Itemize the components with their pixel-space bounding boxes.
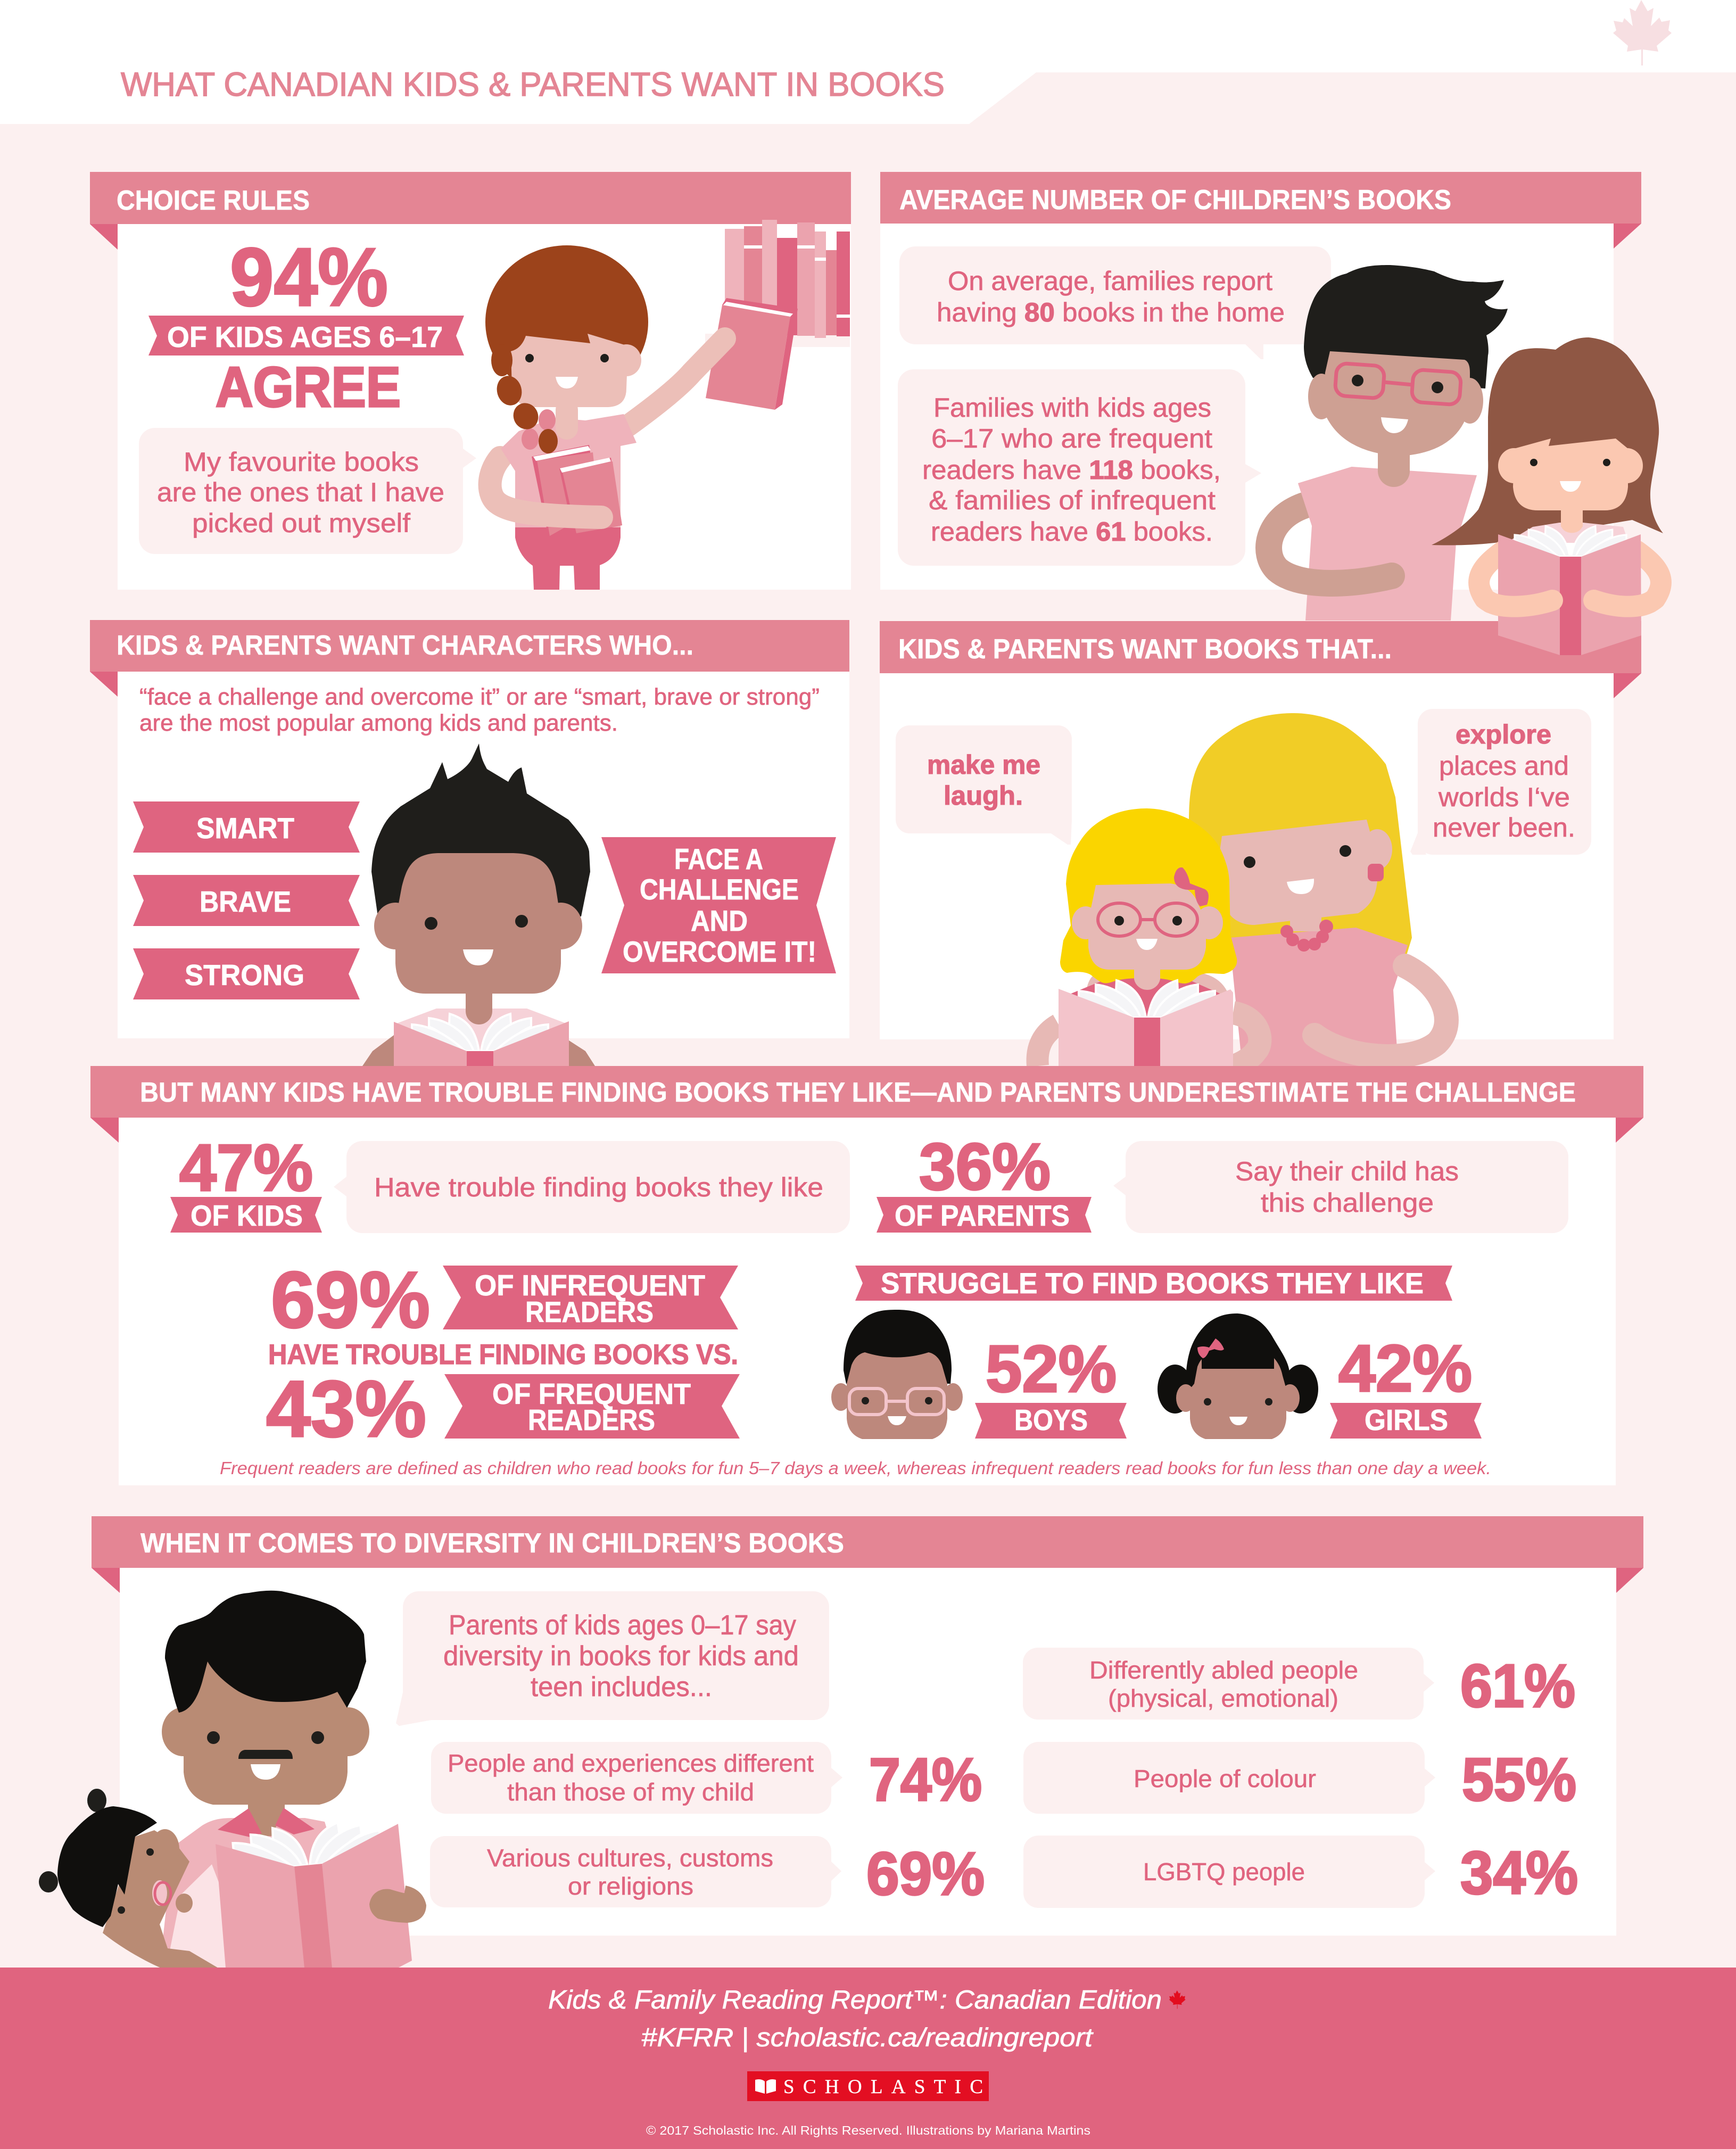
heading: trouble finding books: BUT MANY KIDS HAVE TROUBLE FINDING BOOKS THEY LIKE—AND PARENTS UNDERESTIMATE THE CHALLENGE [140, 1077, 1576, 1108]
stat: 47 percent of kids: 47% [179, 1131, 313, 1205]
stat word: agree: AGREE [216, 355, 401, 419]
heading: diversity [92, 1516, 1643, 1568]
text: most popular characters: are the most popular among kids and parents. [139, 710, 618, 736]
speech bubble: 80 books: On average, families report [948, 266, 1272, 296]
logo: scholastic: SCHOLASTIC [783, 2076, 983, 2098]
icon: girl head [1158, 1313, 1318, 1439]
ribbon: smart: SMART [196, 812, 294, 845]
ribbon: brave: BRAVE [200, 885, 291, 918]
heading: average number of books [880, 172, 1641, 224]
heading: books that [880, 621, 1641, 673]
illustration: girl reading [1432, 337, 1663, 655]
speech bubble: explore places: places and [1439, 751, 1569, 781]
stat: 36 percent of parents [877, 1130, 1092, 1233]
logo: scholastic [747, 2071, 989, 2101]
stat: 36 percent of parents: 36% [919, 1130, 1051, 1204]
panel: average number of books [880, 172, 1663, 655]
speech bubble: parents say: diversity in books for kids and [443, 1641, 799, 1672]
stat: 69 percent of infrequent readers: READERS [525, 1295, 654, 1328]
speech bubble: 80 books [899, 246, 1331, 359]
stat: 69 percent of infrequent readers [271, 1255, 738, 1344]
speech bubble: favourite books: picked out myself [192, 508, 410, 538]
option: differently abled 61 percent: Differently abled people [1089, 1656, 1358, 1684]
heading: choice rules [90, 172, 851, 224]
speech bubble: explore places: explore [1456, 720, 1551, 749]
heading: characters who [90, 620, 849, 672]
option: cultures 69 percent: 69% [866, 1840, 985, 1908]
option: people of colour 55 percent: 55% [1462, 1746, 1576, 1814]
stat: 47 percent of kids [170, 1131, 322, 1233]
option: people of colour 55 percent [1023, 1742, 1576, 1814]
text: most popular characters: “face a challenge and overcome it” or are “smart, brave or strong” [139, 684, 820, 710]
speech bubble: make me laugh: make me [927, 750, 1040, 780]
heading: trouble finding books [90, 1066, 1643, 1118]
illustration: father reading with baby [39, 1591, 426, 1969]
speech bubble: 118 and 61 books: & families of infrequent [929, 485, 1216, 515]
footnote: Frequent readers are defined as children who read books for fun 5–7 days a week, whereas infrequent readers read books for fun less than one day a week. [220, 1458, 1491, 1478]
speech bubble: explore places: never been. [1433, 813, 1575, 842]
panel: characters who [90, 620, 849, 1066]
ribbon: smart [133, 801, 360, 853]
icon: red maple leaf [1169, 1990, 1186, 2009]
stat: 52 percent boys [975, 1333, 1127, 1439]
speech bubble: 80 books: having 80 books in the home [937, 297, 1285, 327]
speech bubble: explore places: worlds I‘ve [1438, 782, 1570, 812]
illustration: father with glasses [1269, 265, 1508, 621]
speech bubble: favourite books: are the ones that I have [157, 477, 444, 507]
illustration: bookshelf [705, 220, 850, 347]
text: most popular characters [139, 684, 820, 736]
speech bubble: favourite books [139, 428, 476, 554]
ribbon: face a challenge and overcome it: OVERCOME IT! [623, 935, 816, 968]
stat: 43 percent of frequent readers: 43% [266, 1364, 426, 1453]
speech bubble: favourite books: My favourite books [184, 447, 419, 477]
title: WHAT CANADIAN KIDS & PARENTS WANT IN BOOKS [121, 66, 945, 103]
stat: 43 percent of frequent readers [266, 1364, 740, 1453]
footer: report title: Kids & Family Reading Report™: Canadian Edition [548, 1986, 1162, 2014]
ribbon: strong: STRONG [185, 958, 304, 991]
ribbon: strong [133, 948, 360, 999]
icon: maple leaf [1613, 0, 1672, 65]
option: differently abled 61 percent [1023, 1648, 1575, 1720]
option: people and experiences 74 percent: than those of my child [507, 1778, 754, 1806]
option: people of colour 55 percent: People of colour [1134, 1765, 1316, 1792]
stat: 36 percent of parents: OF PARENTS [895, 1199, 1070, 1232]
option: cultures 69 percent [430, 1836, 985, 1908]
ribbon: face a challenge and overcome it: CHALLENGE [640, 873, 799, 906]
panel: diversity [39, 1516, 1643, 1969]
stat: 52 percent boys: 52% [986, 1333, 1117, 1406]
icon: boy head [831, 1310, 963, 1439]
stat: 52 percent boys: BOYS [1014, 1403, 1088, 1436]
option: differently abled 61 percent: 61% [1460, 1652, 1575, 1720]
option: people and experiences 74 percent: People and experiences different [448, 1749, 814, 1777]
footer [0, 1968, 1736, 2149]
illustration: mother and daughter reading [1037, 713, 1446, 1070]
stat: 43 percent of frequent readers: OF FREQUENT [492, 1377, 691, 1410]
heading: diversity: WHEN IT COMES TO DIVERSITY IN CHILDREN’S BOOKS [140, 1528, 844, 1559]
speech bubble: make me laugh: laugh. [944, 781, 1023, 811]
speech bubble: trouble finding books: Have trouble finding books they like [374, 1172, 823, 1202]
footer: copyright: © 2017 Scholastic Inc. All Rights Reserved. Illustrations by Mariana Martins [646, 2123, 1090, 2137]
option: cultures 69 percent: Various cultures, customs [487, 1844, 773, 1872]
option: differently abled 61 percent: (physical, emotional) [1108, 1684, 1338, 1712]
ribbon: face a challenge and overcome it [601, 837, 836, 973]
speech bubble: parents say: Parents of kids ages 0–17 say [449, 1610, 796, 1641]
speech bubble: 118 and 61 books: readers have 61 books. [931, 517, 1213, 547]
illustration: girl reaching for a book [485, 245, 798, 590]
ribbon: brave [133, 875, 360, 926]
panel: books that [880, 621, 1641, 1070]
option: lgbtq 34 percent [1023, 1836, 1578, 1908]
speech bubble: make me laugh [896, 725, 1072, 845]
option: cultures 69 percent: or religions [568, 1872, 693, 1900]
panel: choice rules [90, 172, 851, 590]
stat: 69 percent of infrequent readers: OF INFREQUENT [475, 1269, 705, 1302]
illustration: boy reading [362, 743, 595, 1066]
speech bubble: parents say [396, 1591, 829, 1726]
footer: hashtag and url: #KFRR | scholastic.ca/readingreport [641, 2023, 1094, 2052]
stat: 42 percent girls: GIRLS [1365, 1403, 1448, 1436]
ribbon: struggle to find books: STRUGGLE TO FIND BOOKS THEY LIKE [881, 1267, 1424, 1300]
stat: 47 percent of kids: OF KIDS [191, 1199, 303, 1232]
speech bubble: say their child: this challenge [1261, 1188, 1434, 1218]
speech bubble: parents say: teen includes... [531, 1672, 712, 1702]
stat: 94 percent: 94% [230, 231, 388, 323]
heading: characters who: KIDS & PARENTS WANT CHARACTERS WHO... [117, 630, 693, 661]
heading: books that: KIDS & PARENTS WANT BOOKS THAT... [898, 634, 1392, 665]
ribbon: of kids ages 6-17: OF KIDS AGES 6–17 [167, 320, 443, 353]
speech bubble: trouble finding books [334, 1141, 850, 1233]
stat: 43 percent of frequent readers: READERS [528, 1403, 655, 1436]
panel: trouble finding books [90, 1066, 1643, 1485]
option: people and experiences 74 percent [431, 1742, 982, 1814]
ribbon: face a challenge and overcome it: FACE A [674, 842, 763, 875]
option: lgbtq 34 percent: 34% [1460, 1839, 1578, 1907]
option: lgbtq 34 percent: LGBTQ people [1143, 1858, 1305, 1886]
speech bubble: 118 and 61 books: 6–17 who are frequent [931, 424, 1212, 453]
heading: choice rules: CHOICE RULES [117, 185, 310, 216]
option: people and experiences 74 percent: 74% [869, 1746, 982, 1814]
heading: average number of books: AVERAGE NUMBER OF CHILDREN’S BOOKS [899, 185, 1451, 216]
speech bubble: 118 and 61 books: readers have 118 books, [922, 455, 1221, 485]
ribbon: face a challenge and overcome it: AND [691, 904, 748, 937]
stat: 42 percent girls: 42% [1338, 1332, 1472, 1406]
text: have trouble finding books vs: HAVE TROUBLE FINDING BOOKS VS. [268, 1339, 738, 1370]
speech bubble: 118 and 61 books: Families with kids ages [933, 393, 1211, 423]
stat: 69 percent of infrequent readers: 69% [271, 1255, 430, 1344]
speech bubble: say their child [1113, 1141, 1568, 1233]
speech bubble: say their child: Say their child has [1235, 1156, 1459, 1186]
speech bubble: 118 and 61 books [898, 369, 1261, 566]
stat: 42 percent girls [1330, 1332, 1482, 1439]
speech bubble: explore places [1410, 709, 1591, 855]
